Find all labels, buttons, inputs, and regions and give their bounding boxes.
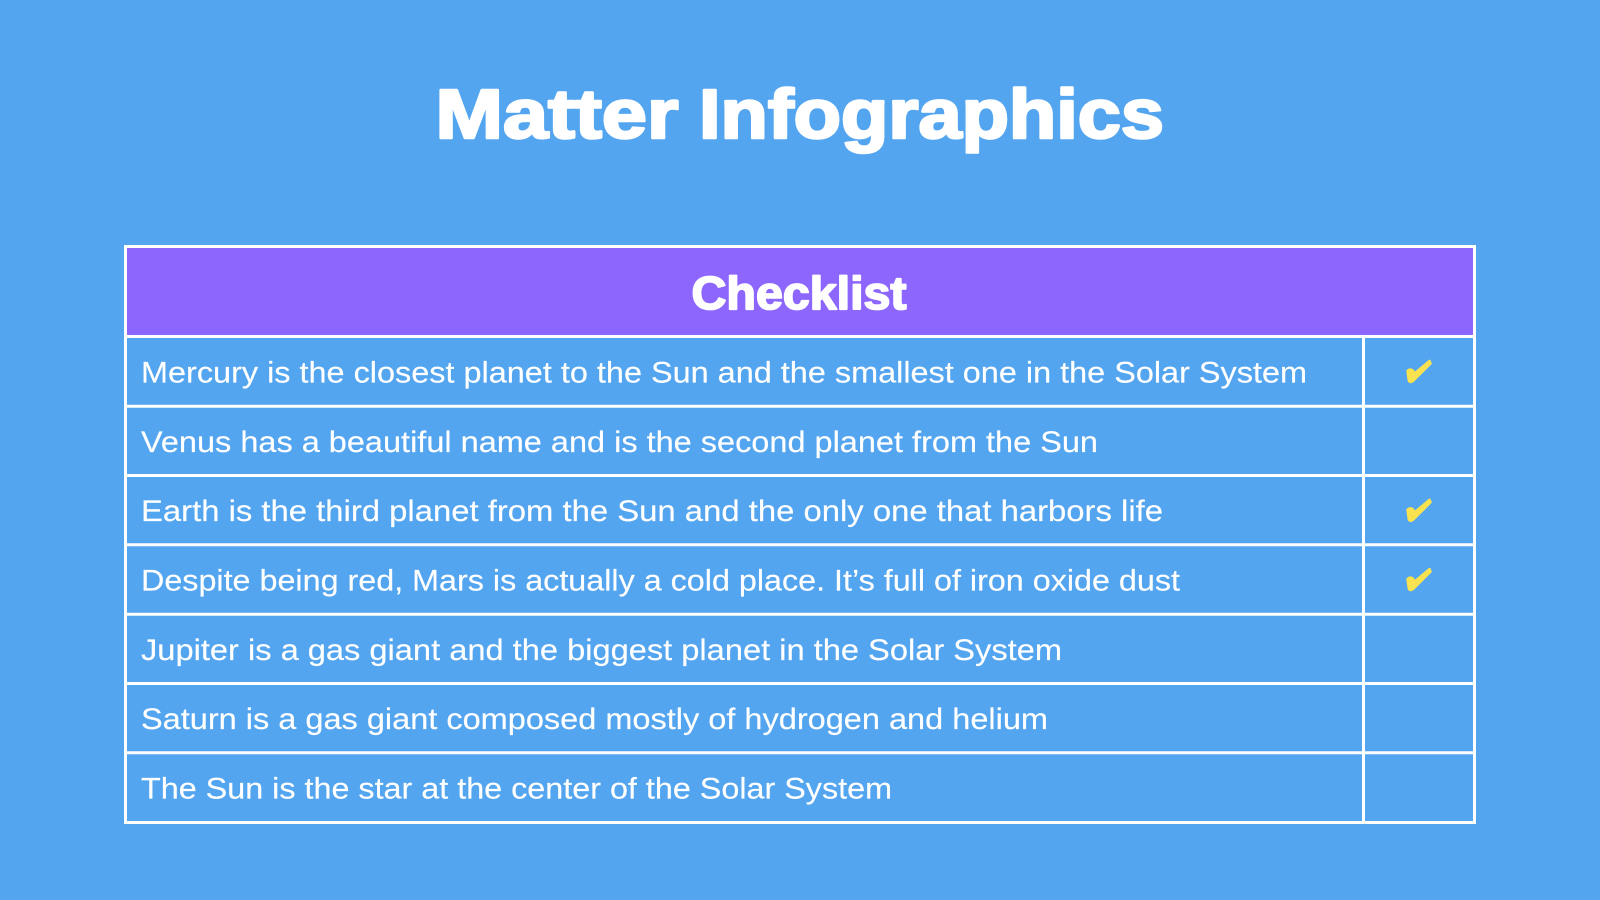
title: Infographics	[699, 75, 1164, 153]
row 5: Jupiter: Jupiter is a gas giant and the biggest planet in the Solar System	[141, 634, 1062, 667]
row 4 check mark	[1408, 569, 1430, 590]
row 1: Mercury: Mercury is the closest planet to the Sun and the smallest one in the Solar System	[141, 356, 1307, 390]
table header: Checklist	[126, 246, 1474, 336]
table header: Checklist: Checklist	[692, 267, 906, 319]
row 3: Earth: Earth is the third planet from the Sun and the only one that harbors life	[141, 495, 1163, 528]
row 3 check mark	[1408, 500, 1430, 521]
row 2: Venus: Venus has a beautiful name and is the second planet from the Sun	[141, 426, 1098, 459]
panel: checklist table	[126, 246, 1474, 822]
title	[436, 75, 1164, 153]
title: Matter	[436, 75, 678, 153]
row 1 check mark	[1408, 361, 1430, 382]
row 6: Saturn: Saturn is a gas giant composed mostly of hydrogen and helium	[141, 703, 1048, 736]
row 4: Mars: Despite being red, Mars is actually a cold place. It’s full of iron oxide dust	[141, 564, 1180, 598]
row 7: The Sun: The Sun is the star at the center of the Solar System	[141, 772, 892, 806]
